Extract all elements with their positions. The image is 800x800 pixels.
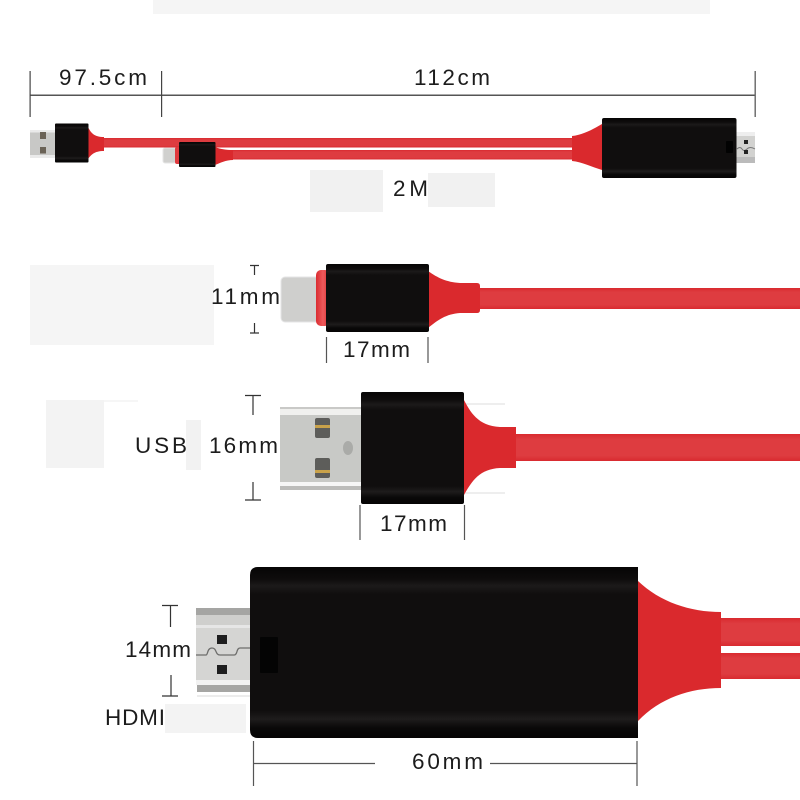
- USB boot: [463, 398, 516, 497]
- overview Lightning plug: [163, 142, 233, 167]
- dimension: HDMI width 60mm: 60mm: [412, 749, 483, 774]
- masked patch: USB label top: [104, 400, 138, 402]
- masked patch: USB label right: [186, 420, 201, 470]
- Lightning boot: [428, 271, 480, 328]
- USB connector: [280, 392, 800, 504]
- dimension: USB width 17mm: 17mm: [380, 511, 447, 536]
- USB metal plug: [280, 407, 362, 490]
- label: 112cm: 112cm: [414, 65, 490, 90]
- dimension: Lightning width 17mm: 17mm: [343, 337, 410, 362]
- label: HDMI: HDMI: [105, 705, 165, 730]
- overview HDMI plug: [572, 118, 755, 178]
- masked patch: USB label: [46, 400, 104, 468]
- dimension: USB height 16mm: 16mm: [209, 433, 278, 458]
- USB boot shadows: [465, 403, 505, 494]
- masked patch: left of 2M: [310, 170, 383, 212]
- Lightning collar: [316, 270, 330, 326]
- HDMI housing: [250, 567, 638, 738]
- overview USB plug: [30, 124, 104, 162]
- HDMI cables: [719, 618, 800, 679]
- Lightning cable: [476, 288, 800, 309]
- dimension: Lightning height 11mm: [211, 266, 280, 333]
- masked patch: Lightning label: [30, 265, 214, 345]
- full cable overview: [30, 118, 755, 178]
- masked patch: right of 2M: [428, 173, 495, 207]
- dimension: Lightning width 17mm: [326, 337, 428, 363]
- label: 97.5cm: 97.5cm: [59, 65, 147, 90]
- Lightning connector: [281, 264, 800, 332]
- HDMI boot: [638, 581, 721, 721]
- Lightning metal tip: [281, 277, 321, 322]
- USB housing: [361, 392, 464, 504]
- masked patch: top: [153, 0, 710, 14]
- dimension: Lightning height 11mm: 11mm: [211, 284, 280, 309]
- dimension: overall lengths: [30, 65, 756, 117]
- dimension: HDMI height 14mm: 14mm: [125, 637, 191, 662]
- masked patch: HDMI label: [165, 704, 246, 733]
- label: 2M: 2M: [393, 176, 428, 201]
- dimension: HDMI height 14mm: [125, 606, 191, 696]
- Lightning housing: [326, 264, 429, 332]
- dimension: USB width 17mm: [360, 505, 464, 540]
- USB cable: [514, 434, 800, 461]
- overview cables: [100, 138, 576, 160]
- label: USB: USB: [135, 433, 187, 458]
- HDMI metal plug: [196, 608, 252, 697]
- dimension: USB height 16mm: [209, 396, 278, 500]
- HDMI connector: [196, 567, 800, 738]
- dimension: HDMI width 60mm: [253, 741, 637, 786]
- HDMI port window: [260, 637, 278, 673]
